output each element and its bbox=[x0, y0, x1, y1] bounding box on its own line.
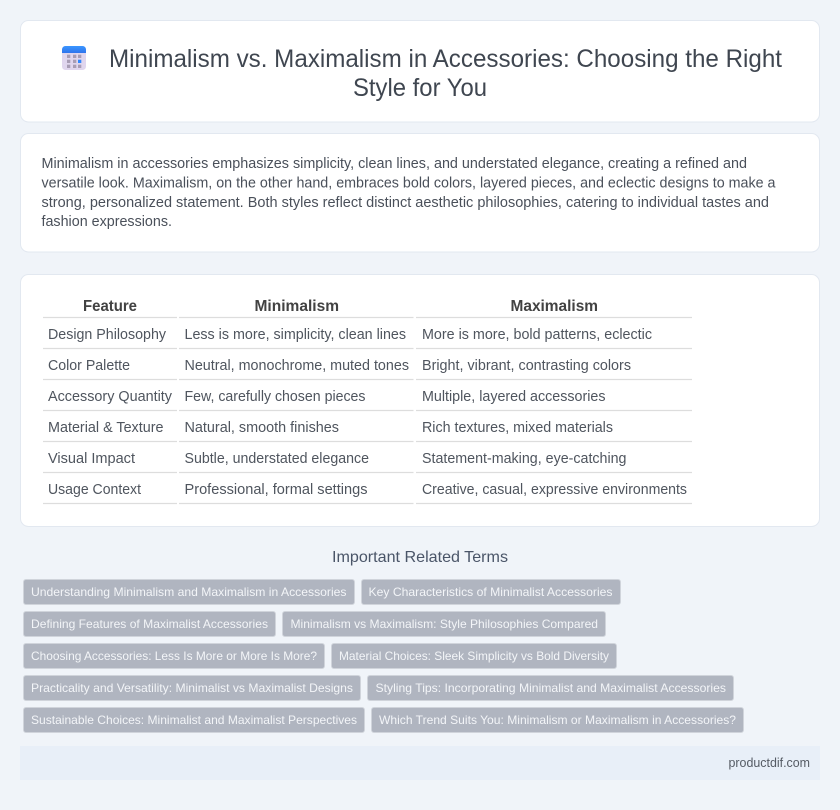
row: visual impact: Visual Impact bbox=[48, 451, 135, 467]
row: usage context: Usage Context bbox=[48, 482, 141, 498]
row: design philosophy bbox=[48, 327, 652, 343]
text block: introduction: Minimalism in accessories emphasizes simplicity, clean lines, and understated elegance, creating a refined and bbox=[42, 156, 747, 172]
table header: Minimalism bbox=[254, 298, 339, 315]
row: usage context: Professional, formal settings bbox=[184, 482, 368, 498]
row: visual impact bbox=[48, 451, 626, 467]
tag bbox=[24, 612, 276, 636]
heading: important related terms: Important Related Terms bbox=[332, 549, 508, 566]
row: accessory quantity: Accessory Quantity bbox=[48, 389, 173, 405]
row: visual impact: Subtle, understated elegance bbox=[184, 451, 369, 467]
tag bbox=[24, 676, 360, 700]
footer bbox=[20, 746, 820, 780]
tag: Key Characteristics of Minimalist Accessories bbox=[368, 585, 612, 599]
icon: calendar bbox=[62, 46, 86, 70]
related term tags bbox=[24, 580, 744, 732]
footer: productdif.com bbox=[728, 755, 810, 770]
row: color palette: Neutral, monochrome, muted tones bbox=[184, 358, 409, 374]
row: usage context: Creative, casual, expressive environments bbox=[422, 482, 687, 498]
tag bbox=[24, 580, 354, 604]
title: Minimalism vs. Maximalism in Accessories: Choosing the Right bbox=[109, 45, 782, 73]
row: accessory quantity: Multiple, layered accessories bbox=[422, 389, 606, 405]
row: material and texture bbox=[48, 420, 613, 436]
tag: Which Trend Suits You: Minimalism or Maximalism in Accessories? bbox=[379, 713, 736, 727]
tag: Defining Features of Maximalist Accessories bbox=[31, 617, 268, 631]
row: design philosophy: Design Philosophy bbox=[48, 327, 167, 343]
row: material and texture: Natural, smooth finishes bbox=[184, 420, 339, 436]
panel: header bbox=[20, 20, 820, 122]
row: material and texture: Rich textures, mixed materials bbox=[422, 420, 613, 436]
row: usage context bbox=[48, 482, 687, 498]
tag: Styling Tips: Incorporating Minimalist and Maximalist Accessories bbox=[376, 681, 726, 695]
row: color palette: Bright, vibrant, contrasting colors bbox=[422, 358, 631, 374]
tag: Minimalism vs Maximalism: Style Philosophies Compared bbox=[290, 617, 598, 631]
tag bbox=[24, 708, 364, 732]
row: color palette bbox=[48, 358, 631, 374]
row: accessory quantity bbox=[48, 389, 606, 405]
panel: comparison table bbox=[20, 274, 820, 526]
tag: Understanding Minimalism and Maximalism in Accessories bbox=[31, 585, 346, 599]
panel: introduction bbox=[20, 134, 820, 252]
tag bbox=[368, 676, 734, 700]
table header: Maximalism bbox=[510, 298, 598, 315]
row: color palette: Color Palette bbox=[48, 358, 130, 374]
table header bbox=[83, 298, 598, 315]
text block: introduction: strong, personalized statement. Both styles reflect distinct aesthetic philosophies, catering to individual tastes and bbox=[42, 195, 769, 211]
text block: introduction bbox=[42, 156, 776, 230]
row: visual impact: Statement-making, eye-catching bbox=[422, 451, 626, 467]
tag bbox=[362, 580, 620, 604]
tag: Material Choices: Sleek Simplicity vs Bold Diversity bbox=[339, 649, 609, 663]
text block: introduction: fashion expressions. bbox=[42, 214, 172, 230]
title bbox=[109, 45, 782, 102]
row: material and texture: Material & Texture bbox=[48, 420, 164, 436]
tag bbox=[372, 708, 744, 732]
tag bbox=[24, 644, 324, 668]
tag bbox=[282, 612, 606, 636]
tag: Sustainable Choices: Minimalist and Maximalist Perspectives bbox=[31, 713, 357, 727]
tag bbox=[332, 644, 616, 668]
row: design philosophy: More is more, bold patterns, eclectic bbox=[422, 327, 652, 343]
row: design philosophy: Less is more, simplicity, clean lines bbox=[184, 327, 406, 343]
table header: Feature bbox=[83, 298, 137, 315]
tag: Choosing Accessories: Less Is More or More Is More? bbox=[31, 649, 317, 663]
title: Style for You bbox=[353, 74, 487, 102]
text block: introduction: versatile look. Maximalism, on the other hand, embraces bold colors, layered pieces, and eclectic designs to make a bbox=[42, 176, 776, 192]
tag: Practicality and Versatility: Minimalist vs Maximalist Designs bbox=[31, 681, 353, 695]
row: accessory quantity: Few, carefully chosen pieces bbox=[184, 389, 366, 405]
